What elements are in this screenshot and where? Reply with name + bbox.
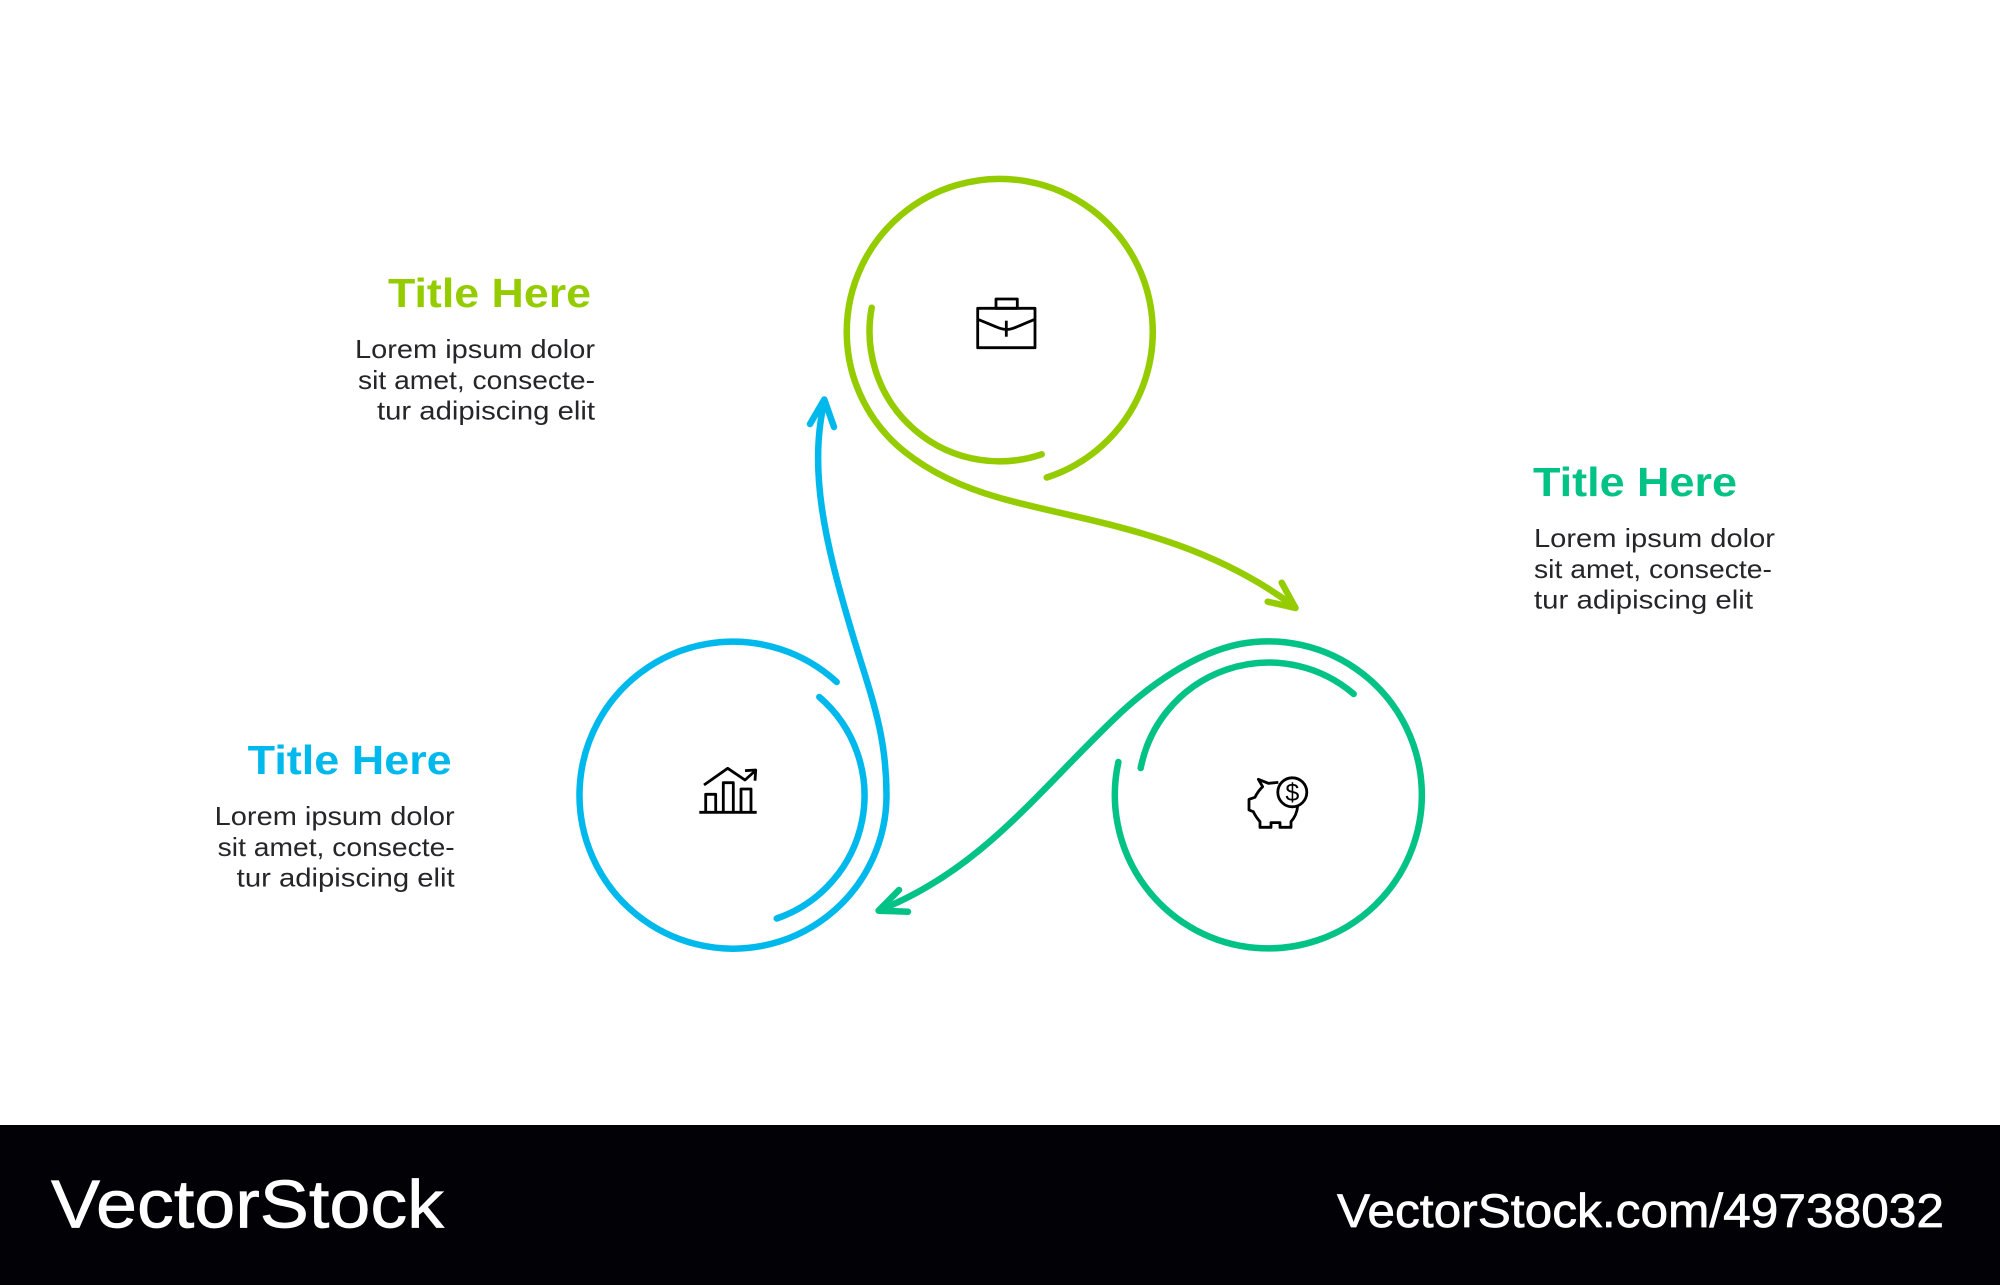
icon: briefcase — [978, 299, 1035, 348]
arrow loop: green circle with arrow — [879, 641, 1422, 948]
text block: lime description: sit amet, consecte- — [358, 365, 595, 395]
heading: lime title: Title Here — [388, 270, 591, 316]
text block: blue description: Lorem ipsum dolor — [215, 801, 455, 831]
text block: green description: tur adipiscing elit — [1534, 584, 1754, 614]
icon: piggy bank with coin — [1249, 778, 1307, 827]
text block: blue description — [215, 801, 456, 892]
text block: lime description: Lorem ipsum dolor — [355, 334, 595, 364]
text block: green description: sit amet, consecte- — [1534, 554, 1772, 584]
panel: blue step text — [215, 737, 456, 892]
text block: green description — [1534, 523, 1775, 614]
text block: blue description: sit amet, consecte- — [218, 832, 455, 862]
icon: piggy bank with coin: $ — [1285, 779, 1299, 807]
arrow loop: blue circle with arrow — [580, 400, 887, 949]
panel: green step text — [1533, 459, 1775, 614]
footer logo text: VectorStock — [51, 1166, 445, 1242]
text block: lime description — [355, 334, 596, 426]
arrow loop: lime circle with arrow — [847, 179, 1296, 608]
footer band — [0, 1125, 2000, 1285]
text block: green description: Lorem ipsum dolor — [1534, 523, 1775, 553]
heading: green title: Title Here — [1533, 459, 1737, 505]
text block: lime description: tur adipiscing elit — [377, 396, 596, 426]
footer image id text: VectorStock.com/49738032 — [1337, 1184, 1944, 1237]
panel: lime step text — [355, 270, 596, 426]
text block: blue description: tur adipiscing elit — [237, 862, 456, 892]
heading: blue title: Title Here — [248, 737, 452, 783]
icon: bar chart with trend arrow — [699, 768, 757, 812]
